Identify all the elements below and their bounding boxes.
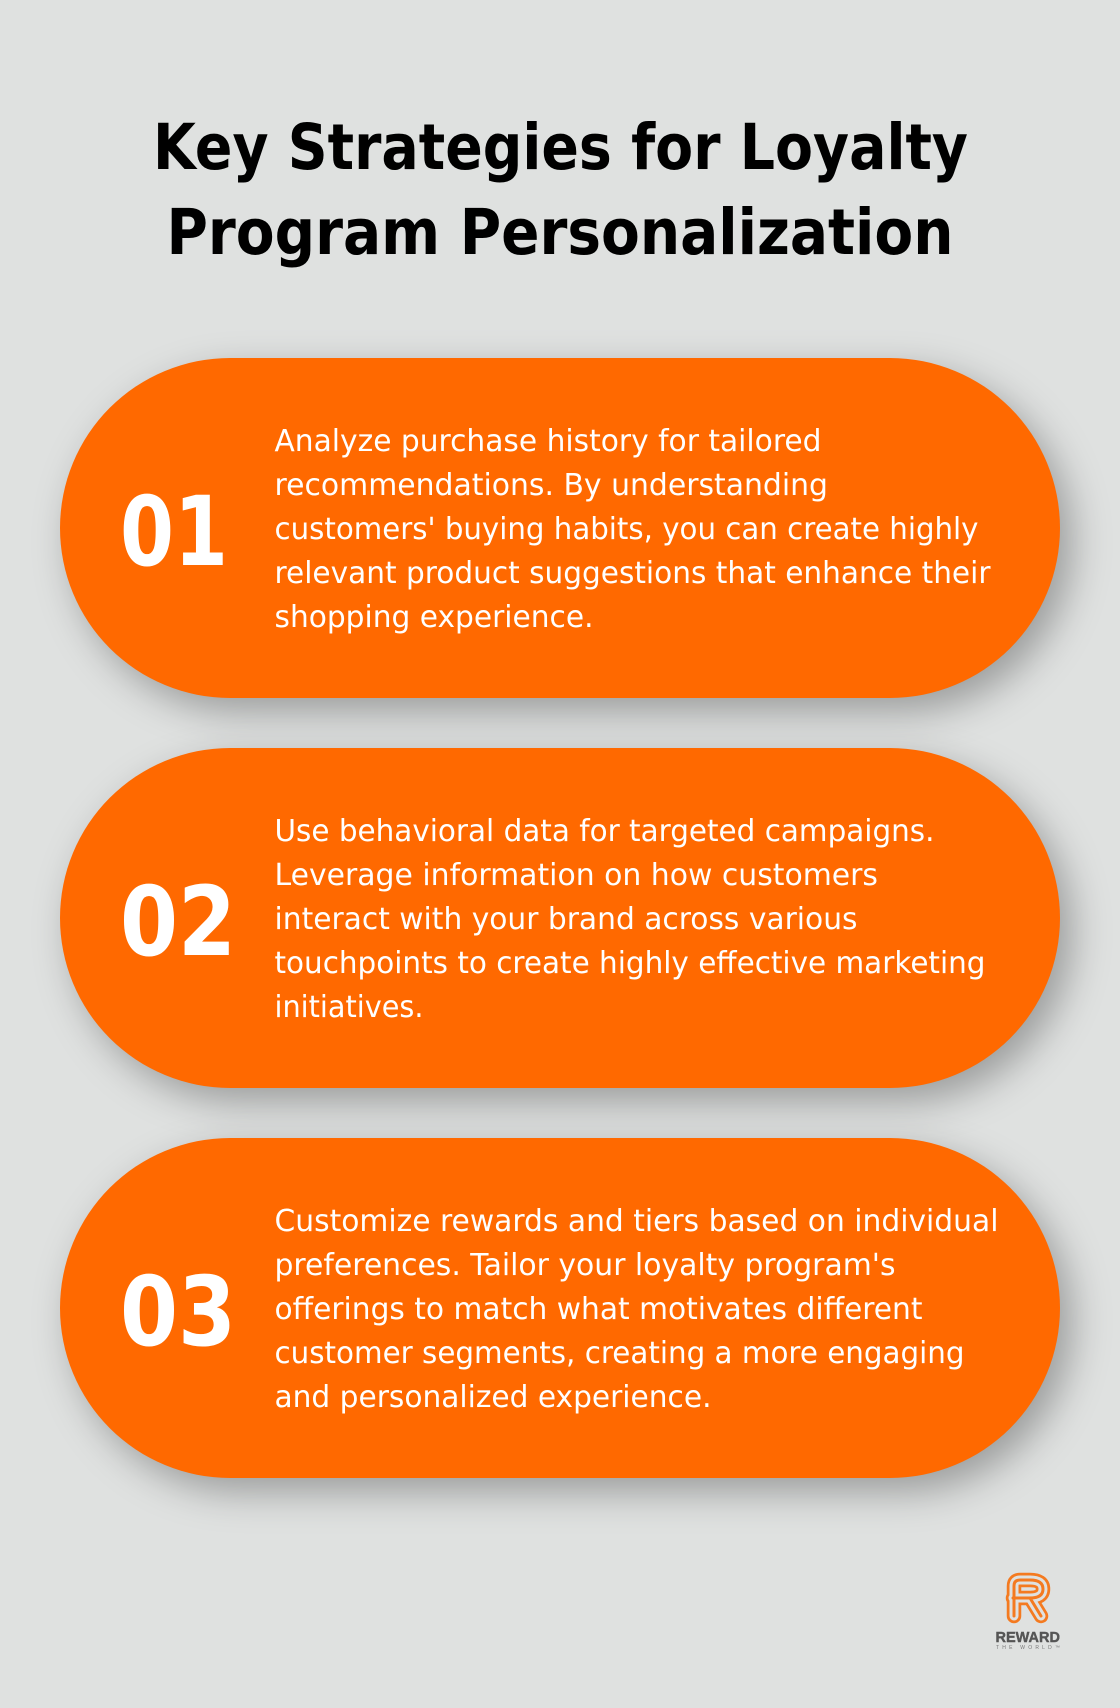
text block 02: Leverage information on how customers [274,858,878,893]
text block 01: shopping experience. [274,600,594,635]
text block 01: customers' buying habits, you can create highly [274,512,978,547]
text block 02 [274,814,986,1025]
text block 02: touchpoints to create highly effective marketing [274,946,986,981]
text block 01: relevant product suggestions that enhance their [274,556,991,591]
logo tagline: THE WORLD™ [996,1645,1060,1651]
text block 02: interact with your brand across various [274,902,858,937]
title [153,111,968,269]
text block 03: Customize rewards and tiers based on individual [274,1204,998,1239]
logo wordmark: REWARD [996,1630,1060,1646]
number 03: 03 [120,1256,236,1368]
text block 01: recommendations. By understanding [274,468,828,503]
icon: R mark [1013,1580,1043,1616]
panel: strategy 01 [60,358,1060,698]
title: Program Personalization [166,196,954,269]
logo: Reward the World [996,1580,1060,1651]
text block 03: offerings to match what motivates different [274,1292,923,1327]
text block 03: customer segments, creating a more engaging [274,1336,964,1371]
text block 02: initiatives. [274,990,424,1025]
text block 03: preferences. Tailor your loyalty program's [274,1248,896,1283]
number 01: 01 [120,476,228,588]
pill background 03 [60,1138,1060,1478]
title: Key Strategies for Loyalty [153,111,968,184]
text block 02: Use behavioral data for targeted campaigns. [274,814,934,849]
text block 03 [274,1204,998,1415]
pill background 01 [60,358,1060,698]
panel: strategy 02 [60,748,1060,1088]
text block 03: and personalized experience. [274,1380,712,1415]
text block 01 [274,424,991,635]
number 02: 02 [120,866,236,978]
text block 01: Analyze purchase history for tailored [274,424,822,459]
pill background 02 [60,748,1060,1088]
panel: strategy 03 [60,1138,1060,1478]
